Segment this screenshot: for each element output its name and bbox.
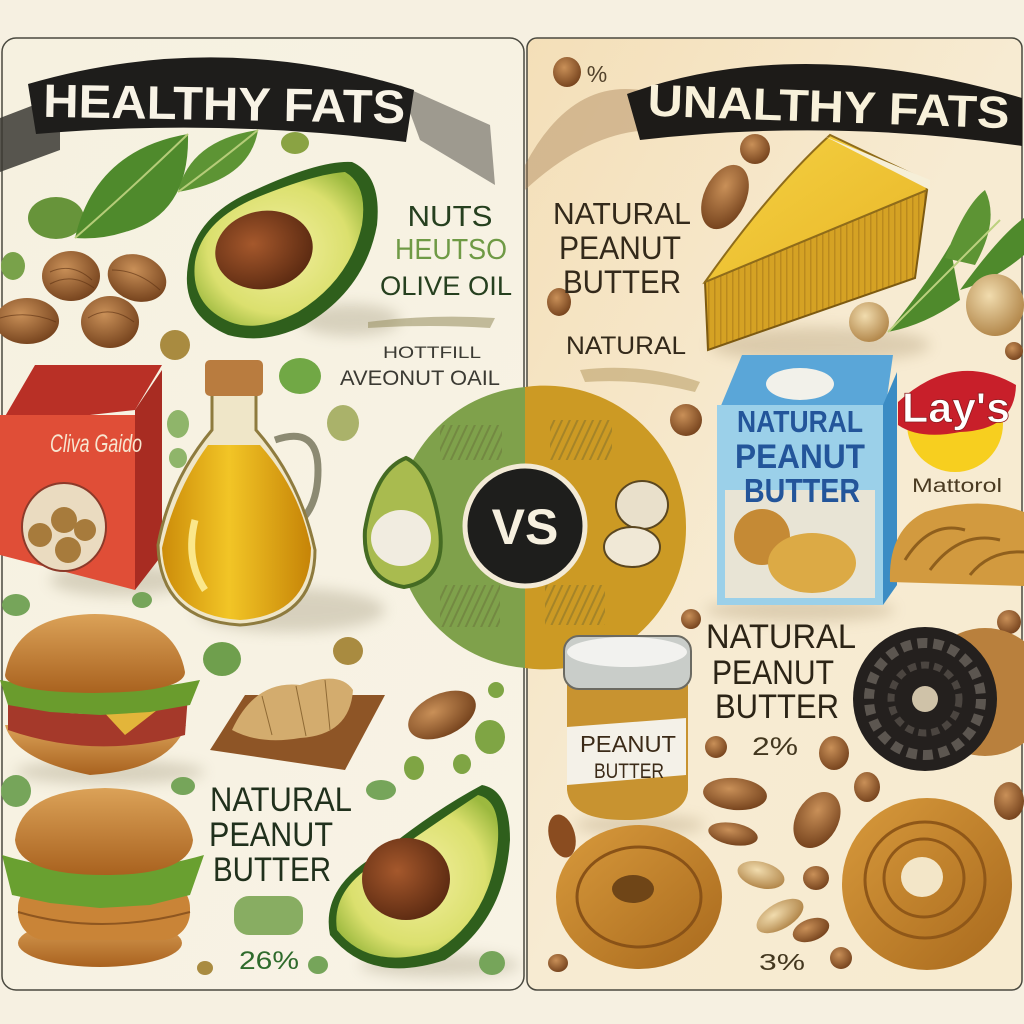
icon: nuts group left: [0, 246, 173, 348]
text: natural peanut butter left: NATURAL: [210, 781, 352, 819]
text: nuts and oil list: [340, 201, 512, 390]
green half: [396, 387, 525, 668]
text: natural peanut butter top: BUTTER: [563, 264, 681, 300]
text: natural peanut butter middle: NATURAL: [706, 618, 856, 656]
icon: avocado half: [365, 458, 441, 587]
icon: green pill: [234, 896, 303, 935]
text: natural peanut butter top: [553, 196, 691, 360]
icon: peanut butter jar: PEANUT: [580, 731, 676, 757]
icon: nuts: [604, 481, 668, 567]
icon: almond: [400, 681, 484, 749]
heading: healthy fats: [28, 57, 414, 142]
versus circle: [365, 386, 686, 669]
icon: olive oil bottle: [158, 360, 318, 625]
heading: unhealthy fats: [627, 64, 1022, 146]
yellow half: [525, 386, 686, 669]
text: natural peanut butter middle: BUTTER: [715, 688, 839, 726]
icon: bread loaf: [890, 504, 1024, 586]
text: percent bottom: 3%: [759, 949, 805, 975]
text: percent left: 26%: [239, 947, 299, 975]
icon: lays chips logo: [898, 371, 1016, 472]
text: percent top: %: [587, 61, 607, 87]
text: natural peanut butter middle: PEANUT: [712, 654, 834, 692]
icon: banner ribbon tail right: [400, 85, 495, 185]
text: natural peanut butter left: BUTTER: [213, 851, 331, 889]
text: nuts and oil list: HOTTFILL: [383, 343, 481, 362]
icon: almonds and small nuts: [544, 57, 1024, 972]
heading: healthy fats: HEALTHY FATS: [43, 74, 406, 133]
icon: milk carton: [717, 355, 897, 605]
text: nuts and oil list: OLIVE OIL: [380, 271, 512, 301]
text: natural peanut butter top: PEANUT: [559, 230, 681, 266]
icon: avocado top: [187, 162, 378, 338]
badge: vs: VS: [492, 499, 558, 555]
panel: unhealthy fats: [525, 38, 1024, 990]
icon: banner ribbon tail: [525, 89, 655, 190]
icon: peanut butter jar: [564, 636, 691, 820]
icon: donut right: [842, 798, 1012, 970]
heading: unhealthy fats: UNALTHY FATS: [647, 75, 1010, 138]
icon: peanut butter jar: BUTTER: [594, 760, 664, 783]
texture patches: [440, 420, 612, 627]
text: natural peanut butter middle: [706, 618, 856, 726]
text: natural peanut butter left: PEANUT: [209, 816, 333, 854]
icon: soft drop shadows: [15, 304, 520, 977]
icon: soft shadows right: [575, 327, 930, 835]
icon: banner ribbon tail left: [0, 95, 60, 172]
text: nuts and oil list: AVEONUT OAIL: [340, 367, 500, 390]
panel: healthy fats: [0, 38, 524, 990]
text: mattorol: Mattorol: [912, 476, 1002, 497]
icon: basil leaves: [28, 130, 258, 239]
icon: leaves and hazelnuts: [849, 190, 1024, 360]
icon: milk carton: NATURAL: [737, 404, 863, 439]
text: natural peanut butter top: NATURAL: [566, 332, 686, 360]
icon: wedge of cheese: [705, 135, 930, 350]
text: natural peanut butter left: [209, 781, 352, 889]
icon: milk carton: BUTTER: [744, 472, 860, 509]
icon: burger bottom: [2, 788, 204, 967]
icon: oreo cookie: [853, 627, 1024, 771]
icon: small green olives: [1, 132, 505, 975]
text: nuts and oil list: HEUTSO: [395, 234, 507, 266]
badge: vs: [465, 466, 585, 586]
icon: milk carton: PEANUT: [735, 438, 865, 476]
text: percent mid: 2%: [752, 733, 798, 761]
icon: sketch strokes: [368, 317, 495, 328]
text: nuts and oil list: NUTS: [408, 201, 492, 233]
icon: small nut beside jar: [681, 609, 701, 629]
icon: lays chips logo: Lay's: [902, 384, 1010, 431]
icon: donut left: [556, 825, 722, 969]
icon: red box: [0, 365, 162, 590]
icon: avocado bottom: [329, 785, 510, 968]
icon: sketch strokes right: [580, 368, 700, 392]
icon: croissant on board: [210, 679, 385, 770]
icon: red box: Cliva Gaido: [50, 430, 142, 458]
text: natural peanut butter top: NATURAL: [553, 196, 691, 231]
icon: burger middle: [0, 614, 200, 775]
